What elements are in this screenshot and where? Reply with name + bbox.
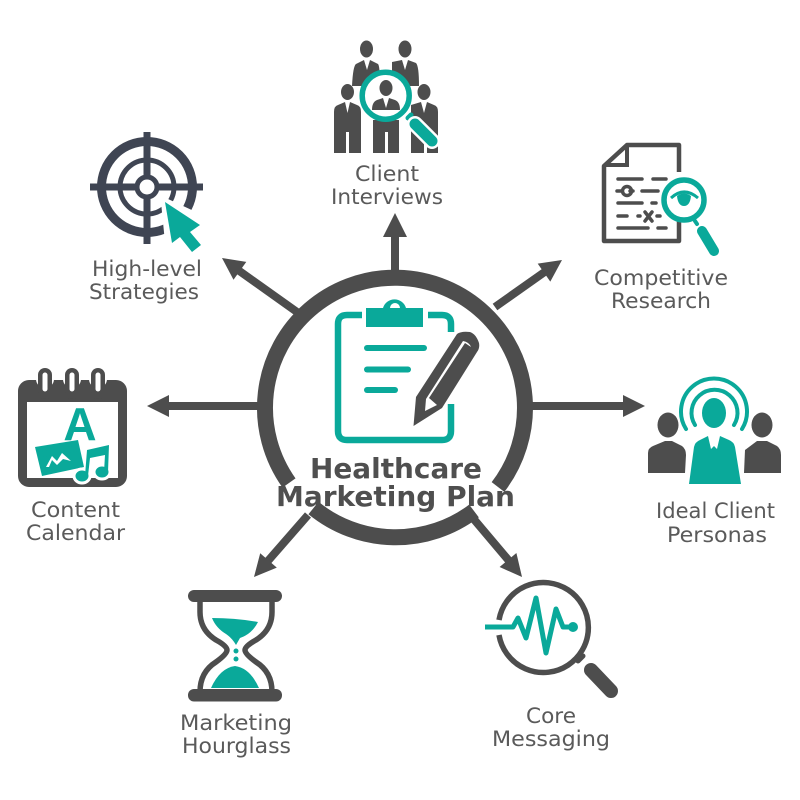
label: marketing hourglass: Hourglass xyxy=(182,734,291,758)
label: marketing hourglass: Marketing xyxy=(180,711,292,735)
label: competitive research xyxy=(594,266,728,313)
label: competitive research: Research xyxy=(611,289,711,313)
arrow: to high-level strategies xyxy=(222,258,297,312)
label: high-level strategies: Strategies xyxy=(89,280,199,304)
title: Healthcare xyxy=(310,452,482,485)
icon: content calendar xyxy=(18,375,127,487)
label: high-level strategies xyxy=(89,257,202,304)
label: competitive research: Competitive xyxy=(594,266,728,290)
icon: client interviews xyxy=(334,40,438,153)
label: ideal client personas: Personas xyxy=(667,523,767,547)
icon: content calendar: A xyxy=(63,398,97,450)
icon: marketing hourglass xyxy=(188,590,282,702)
label: content calendar: Content xyxy=(31,498,120,522)
arrow: to core messaging xyxy=(472,517,522,577)
arrow: to competitive research xyxy=(495,260,562,307)
icon: core messaging xyxy=(485,582,611,691)
icon: clipboard and pencil xyxy=(338,299,479,440)
label: content calendar xyxy=(26,498,125,545)
arrow: to marketing hourglass xyxy=(254,515,308,577)
arrow: to content calendar xyxy=(147,395,260,417)
icon: competitive research xyxy=(604,145,714,251)
label: client interviews xyxy=(331,162,443,209)
arrow: to ideal client personas xyxy=(530,395,645,417)
label: content calendar: Calendar xyxy=(26,521,125,545)
label: core messaging: Messaging xyxy=(492,727,610,751)
label: client interviews: Client xyxy=(355,162,419,186)
label: marketing hourglass xyxy=(180,711,292,758)
icon: ideal client personas xyxy=(648,379,781,484)
title xyxy=(276,452,515,513)
label: ideal client personas xyxy=(656,499,775,547)
title: Marketing Plan xyxy=(276,480,515,513)
central ring xyxy=(265,278,525,537)
label: ideal client personas: Ideal Client xyxy=(656,499,775,523)
icon: target with cursor xyxy=(90,132,208,259)
arrow: to client interviews xyxy=(383,213,407,272)
label: client interviews: Interviews xyxy=(331,185,443,209)
label: core messaging: Core xyxy=(526,704,576,728)
label: core messaging xyxy=(492,704,610,751)
label: high-level strategies: High-level xyxy=(92,257,202,281)
